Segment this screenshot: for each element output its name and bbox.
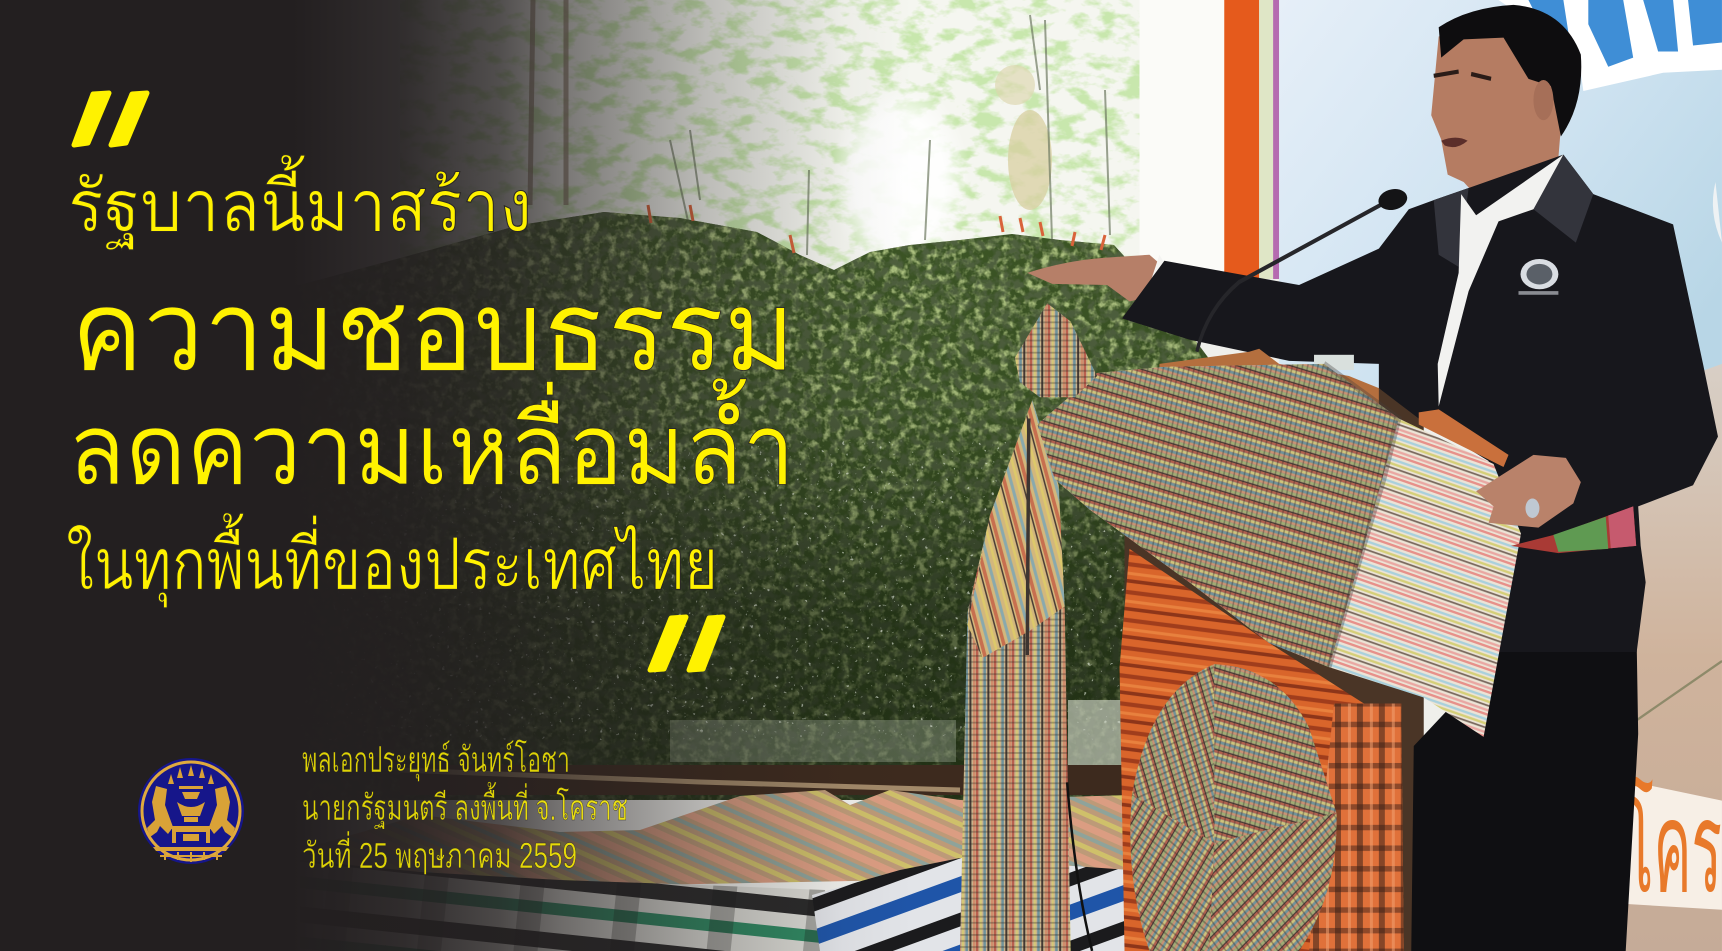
lectern — [1159, 349, 1379, 412]
closing quotation mark — [650, 617, 723, 670]
quote line 3: ลดความเหลื่อมล้ำ — [68, 378, 795, 506]
pale gap and fence — [670, 720, 956, 762]
pointing hand — [1027, 255, 1167, 301]
trousers — [1411, 643, 1638, 951]
attribution: role and place: นายกรัฐมนตรี ลงพื้นที่ จ.โคราช — [302, 781, 628, 830]
neck and head — [1431, 5, 1581, 209]
seal: pedestal — [153, 826, 229, 851]
attribution: date: วันที่ 25 พฤษภาคม 2559 — [302, 831, 577, 876]
quote line 4: ในทุกพื้นที่ของประเทศไทย — [66, 512, 718, 608]
holding hand — [1476, 455, 1581, 528]
red tips on the hedge — [648, 205, 1105, 253]
striped cloth on the benches — [300, 790, 1130, 951]
jacket emblem — [1518, 259, 1558, 295]
quote line 1: รัฐบาลนี้มาสร้าง — [68, 154, 532, 250]
attribution: name: พลเอกประยุทธ์ จันทร์โอชา — [302, 739, 570, 782]
seal: right lion — [209, 786, 235, 837]
opening quotation mark — [74, 93, 147, 145]
jacket collar — [1434, 155, 1593, 267]
rocky backdrop — [1389, 364, 1722, 951]
pale foliage behind the hedge — [442, 0, 1140, 267]
white column — [1139, 0, 1225, 279]
hedge — [352, 212, 1208, 800]
mic cable — [1067, 782, 1092, 951]
banner lettering — [1621, 779, 1722, 910]
woven sash — [1511, 506, 1636, 553]
orange cloth on lectern front — [1120, 549, 1404, 951]
jacket — [1122, 155, 1718, 652]
quote line 2: ความชอบธรรม — [71, 269, 795, 394]
photo background: garden and wall — [356, 0, 1722, 951]
blue check cloth — [812, 858, 1135, 951]
photo: speaker at lectern — [960, 0, 1722, 951]
backdrop banner — [1279, 0, 1722, 425]
space behind the lectern drape — [1125, 388, 1424, 951]
seal of the Prime Minister's Office — [138, 758, 244, 864]
attribution text — [302, 739, 628, 876]
seal: urn — [177, 786, 205, 822]
white shirt — [1438, 155, 1563, 406]
cloth rosette — [1130, 664, 1337, 951]
microphone — [1197, 203, 1384, 352]
main draped cloth — [1037, 364, 1521, 737]
seal: flame crown — [168, 765, 214, 784]
hanging cloth — [960, 400, 1071, 951]
cloth knot — [1015, 303, 1097, 397]
green check cloth — [300, 860, 830, 951]
seal: left lion — [147, 786, 173, 837]
orange post — [1224, 0, 1259, 279]
